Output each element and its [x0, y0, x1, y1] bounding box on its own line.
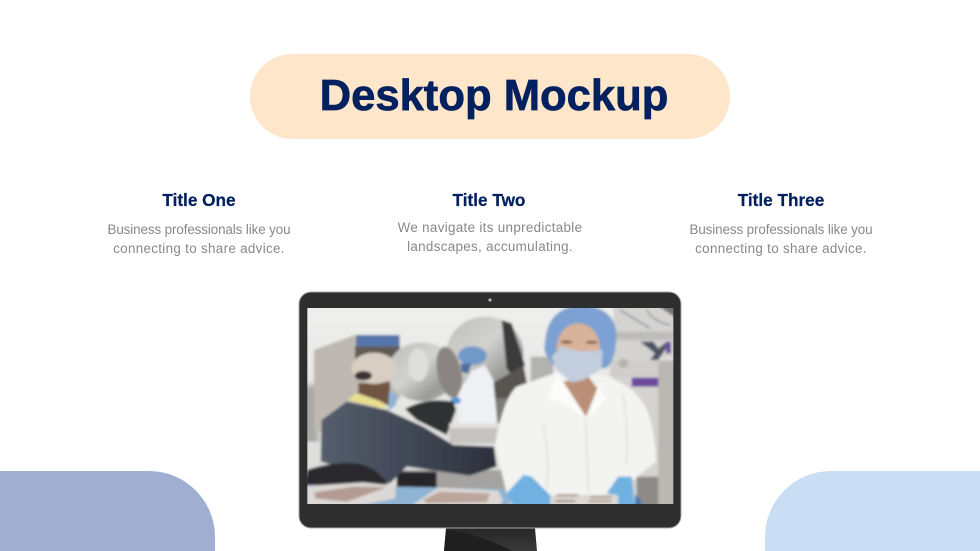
body text: Title Three	[690, 222, 872, 256]
lower counter	[400, 470, 507, 491]
right side equipment	[657, 360, 674, 504]
woman lab coat	[495, 371, 656, 495]
tray in front of woman	[550, 494, 618, 507]
desktop monitor mockup	[298, 292, 682, 551]
heading: Title Three: Title Three	[738, 190, 824, 210]
decorative corner shape: right	[765, 471, 980, 551]
monitor body	[299, 292, 681, 528]
chair front	[303, 463, 388, 488]
body text: Title Two	[398, 220, 582, 254]
woman face and mask	[555, 322, 602, 353]
body text: Title One: Business professionals like you	[108, 222, 290, 237]
body text: Title Two: landscapes, accumulating.	[407, 239, 573, 254]
body text: Title One	[108, 222, 290, 256]
back worker	[458, 365, 497, 423]
title text: Desktop Mockup	[320, 72, 668, 120]
body text: Title Three: connecting to share advice.	[695, 241, 867, 256]
column: Title Two	[398, 190, 582, 254]
steel kettles	[447, 317, 523, 390]
body text: Title Two: We navigate its unpredictable	[398, 220, 582, 235]
heading: Title Two: Title Two	[453, 190, 525, 210]
title pill	[250, 54, 730, 139]
woman hairnet	[544, 305, 617, 368]
table and trays	[303, 485, 510, 508]
column: Title Three	[690, 190, 872, 256]
body text: Title One: connecting to share advice.	[113, 241, 285, 256]
heading: Title One: Title One	[162, 190, 236, 210]
monitor stand	[444, 528, 537, 551]
bench	[448, 427, 498, 444]
wall	[307, 308, 616, 504]
gloves	[507, 475, 551, 507]
webcam	[488, 298, 492, 302]
screen photo: factory workers	[303, 305, 677, 508]
machine	[314, 335, 400, 432]
decorative corner shape: left	[0, 471, 215, 551]
seated man	[321, 402, 497, 483]
body text: Title Three: Business professionals like you	[690, 222, 872, 237]
column: Title One	[108, 190, 290, 256]
chair back	[405, 400, 456, 435]
